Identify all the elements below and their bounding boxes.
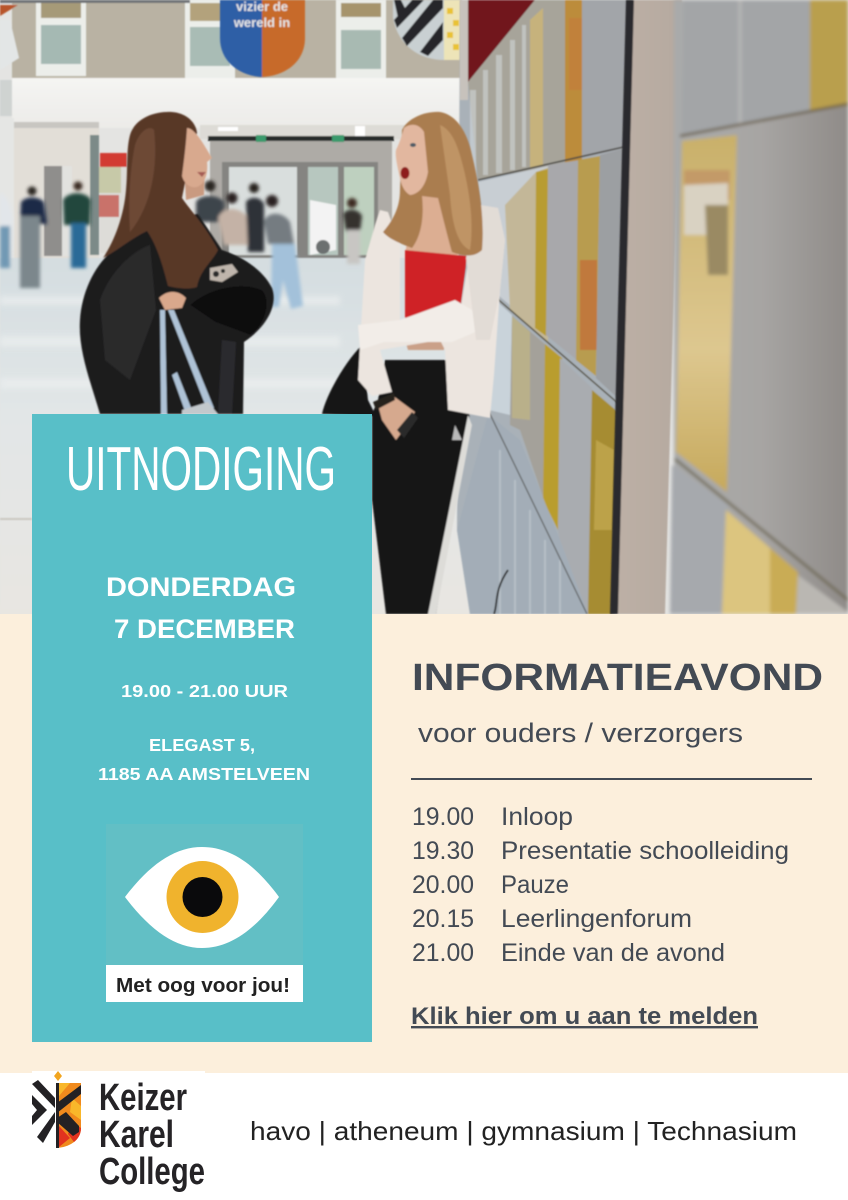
teal invitation panel bbox=[32, 414, 372, 1042]
programme schedule: Pauze bbox=[501, 871, 569, 899]
subheading: voor ouders / verzorgers bbox=[418, 718, 743, 748]
logo text: Keizer bbox=[99, 1077, 187, 1119]
wall banner shield bbox=[220, 0, 305, 77]
icon: eye with slogan: Met oog voor jou! bbox=[116, 975, 290, 997]
address: 1185 AA AMSTELVEEN bbox=[98, 764, 310, 784]
logo text: College bbox=[99, 1151, 205, 1193]
logo text bbox=[99, 1077, 205, 1193]
time: 19.00 - 21.00 UUR bbox=[121, 681, 288, 701]
programme schedule: 19.00 bbox=[412, 803, 474, 831]
wall banner shield: wereld in bbox=[233, 15, 290, 30]
background people bbox=[0, 180, 362, 309]
logo text: Karel bbox=[99, 1114, 174, 1156]
programme schedule bbox=[412, 803, 789, 967]
heading: uitnodiging: UITNODIGING bbox=[66, 435, 336, 504]
pillar and dark edge bbox=[610, 0, 682, 614]
heading: informatieavond: INFORMATIEAVOND bbox=[412, 657, 823, 699]
programme schedule: 20.00 bbox=[412, 871, 474, 899]
address: ELEGAST 5, bbox=[149, 735, 255, 755]
icon: eye with slogan bbox=[106, 824, 303, 1002]
registration link: Klik hier om u aan te melden bbox=[411, 1003, 758, 1030]
programme schedule: Presentatie schoolleiding bbox=[501, 837, 789, 865]
wall banner striped shield bbox=[393, 0, 460, 60]
white footer band bbox=[0, 1073, 848, 1200]
school types: havo | atheneum | gymnasium | Technasium bbox=[250, 1116, 797, 1146]
girl right: white cardigan, red top, black trousers bbox=[322, 112, 505, 614]
blurred foreground panels right bbox=[670, 0, 848, 614]
programme schedule: 19.30 bbox=[412, 837, 474, 865]
programme schedule: Leerlingenforum bbox=[501, 905, 692, 933]
icon: shield bbox=[32, 1071, 81, 1148]
date: 7 DECEMBER bbox=[114, 614, 295, 644]
date bbox=[106, 572, 296, 644]
logo: Keizer Karel College bbox=[32, 1071, 205, 1196]
programme schedule: 20.15 bbox=[412, 905, 474, 933]
floor reflections bbox=[0, 296, 340, 389]
cream background panel bbox=[0, 614, 848, 1073]
programme schedule: 21.00 bbox=[412, 939, 474, 967]
photo: two students in school hall bbox=[0, 0, 848, 614]
girl left: black jacket, long brown hair bbox=[80, 112, 274, 414]
lockers wall left section bbox=[457, 0, 632, 614]
programme schedule: Inloop bbox=[501, 803, 573, 831]
programme schedule: Einde van de avond bbox=[501, 939, 725, 967]
hall back wall with brick and windows bbox=[0, 0, 470, 614]
address bbox=[98, 735, 310, 784]
date: DONDERDAG bbox=[106, 572, 296, 602]
